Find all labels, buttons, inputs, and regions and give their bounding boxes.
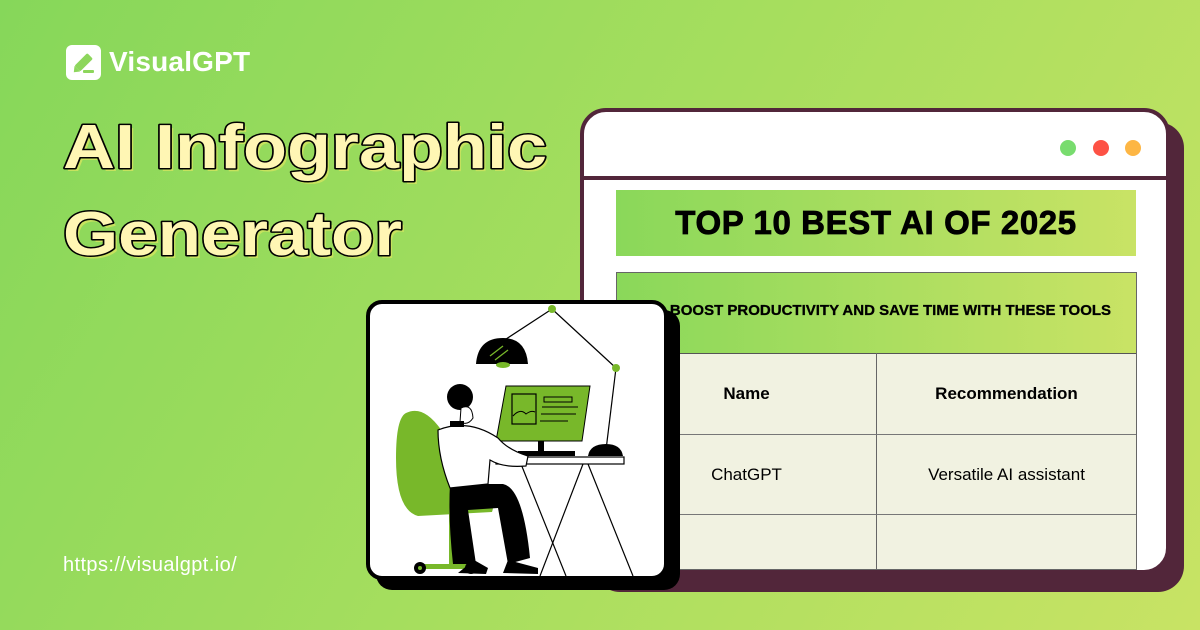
window frame [580, 108, 1170, 574]
row: ChatGPT: Versatile AI assistant [928, 465, 1085, 484]
card [366, 300, 668, 580]
row: ChatGPT: ChatGPT [711, 465, 782, 484]
icon: pencil logo [66, 45, 101, 80]
window dots [1060, 140, 1141, 156]
table: BOOST PRODUCTIVITY AND SAVE TIME WITH THESE TOOLS [670, 302, 1111, 319]
chair [396, 411, 493, 574]
url: https://visualgpt.io/ [63, 554, 237, 576]
column headers: Recommendation [935, 384, 1078, 403]
title: AI Infographic [63, 113, 547, 182]
column headers: Name [723, 384, 770, 403]
title: AI Infographic [66, 116, 550, 185]
person [438, 384, 538, 574]
table [616, 272, 1137, 570]
illustration: person at desk [396, 305, 634, 576]
title: Generator [66, 203, 405, 272]
card shadow [376, 310, 680, 590]
column headers [723, 384, 1078, 403]
title bar line [584, 176, 1174, 180]
banner: top 10 [616, 190, 1136, 256]
illustration card [366, 300, 680, 590]
window shadow [594, 122, 1184, 592]
browser window [580, 108, 1184, 592]
desk [496, 457, 633, 576]
lamp [476, 305, 623, 456]
title: Generator [63, 200, 402, 269]
banner: top 10: TOP 10 BEST AI OF 2025 [675, 204, 1077, 241]
table header [617, 273, 1136, 354]
logo [66, 45, 250, 80]
row: ChatGPT [711, 465, 1085, 484]
logo text: VisualGPT [109, 46, 250, 77]
monitor [496, 386, 590, 456]
title [63, 113, 550, 272]
